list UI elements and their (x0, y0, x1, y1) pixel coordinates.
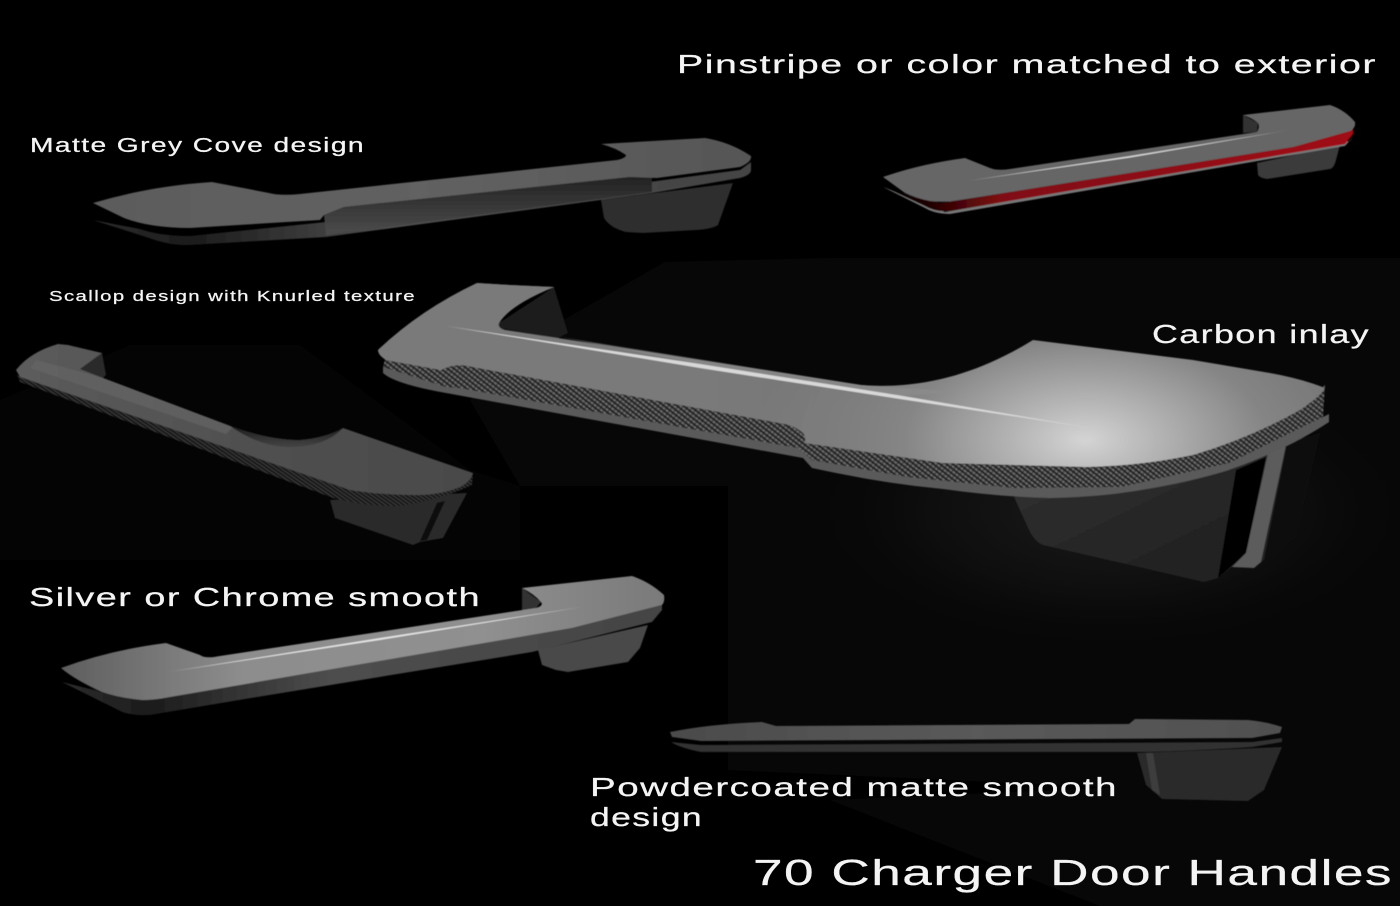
lower lip (671, 738, 1282, 752)
handle: pinstripe red (883, 105, 1355, 214)
handle: silver or chrome smooth (61, 576, 664, 715)
handle bucket (538, 625, 648, 672)
top surface (61, 576, 664, 700)
lower lip (93, 170, 751, 245)
label: matte grey cove: Matte Grey Cove design (30, 135, 365, 157)
label: pinstripe: Pinstripe or color matched to exterior (677, 49, 1377, 79)
grey outer lip (883, 137, 1353, 214)
label: powdercoated (590, 772, 1118, 832)
highlight (967, 130, 1290, 181)
lower lip (62, 605, 662, 715)
top surface (16, 344, 473, 495)
top surface (93, 138, 751, 228)
handle bucket (1257, 145, 1340, 179)
highlight (446, 326, 1091, 428)
scallop cove shade (230, 426, 343, 447)
label: scallop: Scallop design with Knurled texture (49, 289, 416, 305)
cove wall (80, 353, 106, 378)
label: carbon inlay: Carbon inlay (1152, 319, 1370, 349)
cove wall (522, 588, 541, 612)
upper bevel (560, 337, 960, 396)
end lip highlight (657, 162, 751, 190)
red pinstripe band (884, 129, 1353, 211)
label: silver or chrome: Silver or Chrome smooth (29, 582, 481, 612)
handle bucket (601, 183, 733, 233)
knurled band (17, 375, 473, 506)
bucket strip (420, 501, 445, 541)
handle: scallop with knurled texture (16, 344, 473, 545)
highlight (168, 607, 582, 672)
left shading over top surface (378, 283, 1193, 467)
top surface (883, 105, 1355, 202)
cove wall (499, 287, 568, 338)
top surface (378, 283, 1325, 467)
carbon fibre band (383, 355, 1325, 488)
top surface (670, 719, 1282, 741)
handle: matte grey cove design (93, 138, 751, 245)
label: powdercoated: Powdercoated matte smooth (590, 772, 1118, 802)
handle bucket (1014, 433, 1320, 582)
black gap (62, 677, 135, 700)
label: powdercoated: design (590, 802, 703, 832)
upper bevel (30, 360, 233, 434)
inset cove (324, 176, 652, 235)
bucket strip (1146, 753, 1160, 795)
handle: large carbon inlay (378, 283, 1329, 582)
title: 70 Charger Door Handles (753, 852, 1393, 893)
handle bucket (330, 493, 467, 545)
handle: powdercoated matte smooth (670, 719, 1282, 801)
grey lower lip (383, 367, 1329, 498)
cove wall (1243, 115, 1258, 133)
handle bucket (1137, 747, 1282, 801)
